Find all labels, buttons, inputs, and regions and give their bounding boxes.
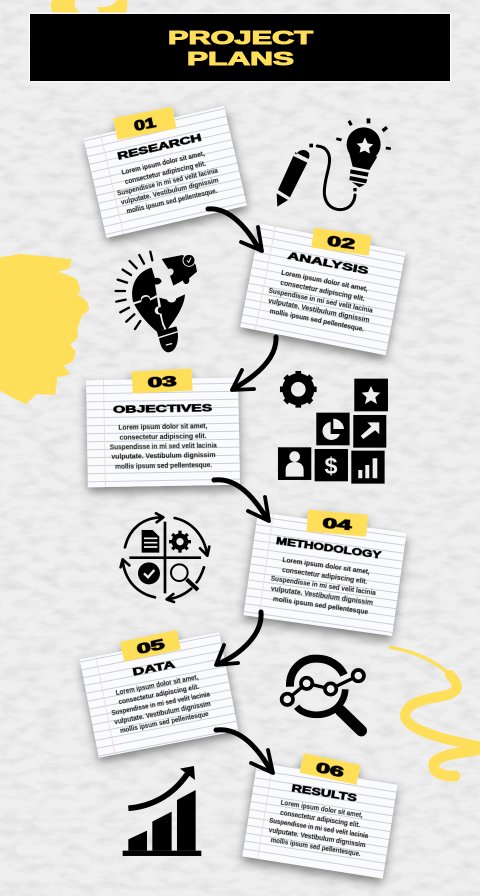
icon: gear and blocks — [278, 371, 388, 484]
body text: Suspendisse in mi sed velit lacinia — [116, 166, 219, 198]
puzzle piece: detached upper right — [162, 255, 197, 286]
body text: mollis ipsum sed pellentesque. — [269, 306, 365, 333]
body text — [266, 796, 373, 859]
body text: Suspendisse in mi sed velit lacinia — [270, 574, 377, 597]
panel: 06 results — [242, 746, 400, 879]
panel: 03 objectives — [86, 368, 240, 487]
body text: vulputate. Vestibulum dignissim — [120, 175, 220, 207]
tag 04 — [306, 510, 368, 537]
body text — [268, 554, 380, 617]
tag 02: 02 — [326, 232, 357, 252]
puzzle piece: upper left — [132, 268, 162, 302]
heading: methodology: METHODOLOGY — [275, 536, 382, 562]
tag 02 — [311, 228, 371, 256]
panel: 04 methodology — [243, 500, 408, 636]
heading: data: DATA — [132, 659, 176, 678]
tag 03 — [132, 368, 193, 394]
body text: vulputate. Vestibulum dignissim — [113, 699, 212, 726]
body text: vulputate. Vestibulum dignissim — [268, 825, 367, 849]
body text: consectetur adipiscing elit. — [118, 682, 200, 706]
tag 05 — [120, 630, 181, 662]
icon: growth chart — [123, 766, 201, 856]
tag 03: 03 — [147, 373, 177, 390]
body text: vulputate. Vestibulum dignissim — [267, 296, 371, 324]
arrow: 01 to 02 — [208, 209, 262, 251]
heading: research: RESEARCH — [116, 133, 203, 163]
body text: Lorem ipsum dolor sit amet, — [281, 268, 369, 293]
icon: pie block — [316, 413, 350, 445]
body text: Lorem ipsum dolor sit amet, — [118, 421, 207, 432]
body text: Suspendisse in mi sed velit lacinia — [110, 441, 218, 452]
arrow: 05 to 06 — [216, 730, 273, 773]
tag 01 — [113, 107, 176, 140]
body text: Suspendisse in mi sed velit lacinia — [111, 689, 211, 717]
body text: Suspendisse in mi sed velit lacinia — [268, 286, 374, 315]
yellow paint splash: top — [51, 0, 127, 14]
icon: dollar block: $ — [324, 453, 337, 479]
panel: 01 research — [81, 93, 247, 238]
icon: bars block — [351, 451, 385, 484]
body text: Lorem ipsum dolor sit amet, — [121, 149, 206, 177]
body text: Suspendisse in mi sed velit lacinia — [269, 816, 370, 840]
body text: consectetur adipiscing elit. — [282, 565, 368, 586]
arrow: 04 to 05 — [216, 612, 261, 665]
arrow: 03 to 04 — [214, 480, 269, 521]
yellow paint squiggle: right — [391, 647, 480, 776]
body text: consectetur adipiscing elit. — [280, 808, 361, 829]
heading: objectives: OBJECTIVES — [113, 403, 213, 416]
body text: Lorem ipsum dolor sit amet, — [282, 555, 370, 576]
body text — [264, 266, 378, 335]
title: PROJECT — [168, 27, 314, 48]
body text: mollis ipsum sed pellentesque — [272, 594, 369, 616]
icon: puzzle light bulb — [116, 252, 197, 352]
puzzle piece: lower left — [134, 297, 164, 333]
tag 05: 05 — [135, 635, 166, 657]
body text: mollis ipsum sed pellentesque — [119, 709, 209, 735]
body text: vulputate. Vestibulum dignissim — [111, 450, 216, 461]
yellow paint splash: left — [0, 254, 89, 404]
body text: mollis ipsum sed pellentesque. — [270, 835, 361, 858]
title — [168, 27, 314, 69]
body text — [109, 421, 218, 471]
icon: data magnifier — [282, 659, 364, 731]
body text: consectetur adipiscing elit. — [280, 278, 366, 303]
heading: results: RESULTS — [291, 783, 358, 804]
tag 01: 01 — [133, 114, 157, 134]
icon: person block — [278, 447, 311, 480]
heading: analysis: ANALYSIS — [287, 251, 370, 277]
icon: gear — [280, 371, 317, 408]
body text: consectetur adipiscing elit. — [124, 159, 207, 186]
icon: star block — [354, 379, 388, 411]
title banner — [28, 12, 452, 82]
tag 06: 06 — [315, 759, 346, 780]
body text: Lorem ipsum dolor sit amet, — [115, 672, 199, 697]
icon: pencil and light bulb — [277, 118, 391, 210]
icon: arrow block — [353, 415, 386, 448]
panel: 05 data — [78, 622, 238, 758]
puzzle piece: lower right — [158, 294, 185, 330]
tag 06 — [300, 753, 361, 785]
tag 04: 04 — [322, 514, 353, 533]
body text: mollis ipsum sed pellentesque. — [126, 186, 218, 216]
body text: consectetur adipiscing elit. — [120, 431, 207, 442]
body text — [112, 147, 224, 217]
icon: process cycle — [121, 513, 209, 602]
body text: Lorem ipsum dolor sit amet, — [280, 798, 363, 820]
title: PLANS — [187, 48, 294, 69]
panel: 02 analysis — [240, 215, 407, 355]
body text — [107, 671, 215, 736]
body text: vulputate. Vestibulum dignissim — [270, 584, 374, 607]
body text: mollis ipsum sed pellentesque. — [115, 460, 212, 471]
arrow: 02 to 03 — [232, 337, 276, 390]
